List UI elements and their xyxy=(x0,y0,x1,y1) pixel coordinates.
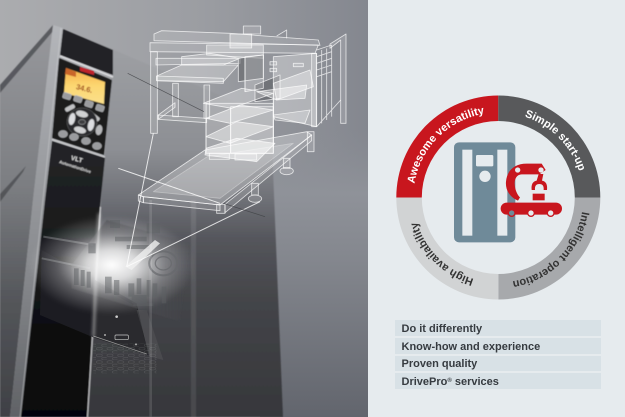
glow xyxy=(28,213,195,337)
chart: four-segment ring xyxy=(396,96,600,300)
lcd display xyxy=(64,67,105,104)
segment: awesome versatility xyxy=(396,96,498,198)
cabinet side face xyxy=(0,25,53,417)
row: drivepro services xyxy=(395,373,601,389)
segment: high availability xyxy=(396,198,498,300)
panel: product photo background xyxy=(0,0,368,417)
row: proven quality xyxy=(395,356,601,371)
frame legs xyxy=(151,34,346,152)
upper black panel xyxy=(60,29,113,75)
row: know-how and experience xyxy=(395,338,601,354)
list: benefits xyxy=(395,320,601,389)
upper shelves xyxy=(156,45,341,127)
row: drivepro services: ® xyxy=(447,377,452,384)
cabinet front face xyxy=(63,28,283,417)
row: drivepro services: services xyxy=(452,376,499,388)
illustration: exposed circuit board with glow xyxy=(28,213,195,373)
label: intelligent operation: Intelligent operation xyxy=(513,212,590,287)
product name: VLT xyxy=(70,155,83,165)
icon: drive cabinet and robot xyxy=(454,142,562,242)
lower black panel xyxy=(21,141,105,417)
lower plate xyxy=(40,237,163,373)
icon: robot arm on conveyor xyxy=(501,164,562,216)
row: drivepro services: DrivePro xyxy=(402,376,447,388)
label: high availability: High availability xyxy=(411,224,474,286)
label: simple start-up: Simple start-up xyxy=(526,110,584,170)
keypad buttons xyxy=(58,92,105,150)
connector lines xyxy=(118,73,265,417)
panel: right side background xyxy=(368,0,625,417)
central tower xyxy=(203,57,275,162)
row: proven quality: Proven quality xyxy=(402,358,478,370)
conveyor feet xyxy=(248,158,293,202)
lcd display: 34.6. xyxy=(75,82,94,95)
segment: intelligent operation xyxy=(498,198,600,300)
circuit board xyxy=(72,220,190,322)
right vertical strip xyxy=(191,200,196,417)
row: do it differently xyxy=(395,320,601,336)
row: know-how and experience: Know-how and experience xyxy=(402,341,540,353)
icon: drive cabinet xyxy=(454,142,515,242)
label: awesome versatility: Awesome versatility xyxy=(408,108,484,184)
cabinet light edge strip xyxy=(10,25,63,417)
keypad panel xyxy=(52,58,112,155)
row: do it differently: Do it differently xyxy=(402,323,483,335)
top frame xyxy=(150,26,320,58)
electronic components xyxy=(74,220,177,306)
segment: simple start-up xyxy=(498,96,600,198)
product name: AutomationDrive xyxy=(59,159,92,174)
illustration: wireframe machine xyxy=(118,26,346,417)
conveyor table xyxy=(138,132,312,213)
panel: frequency drive cabinet xyxy=(0,25,283,417)
